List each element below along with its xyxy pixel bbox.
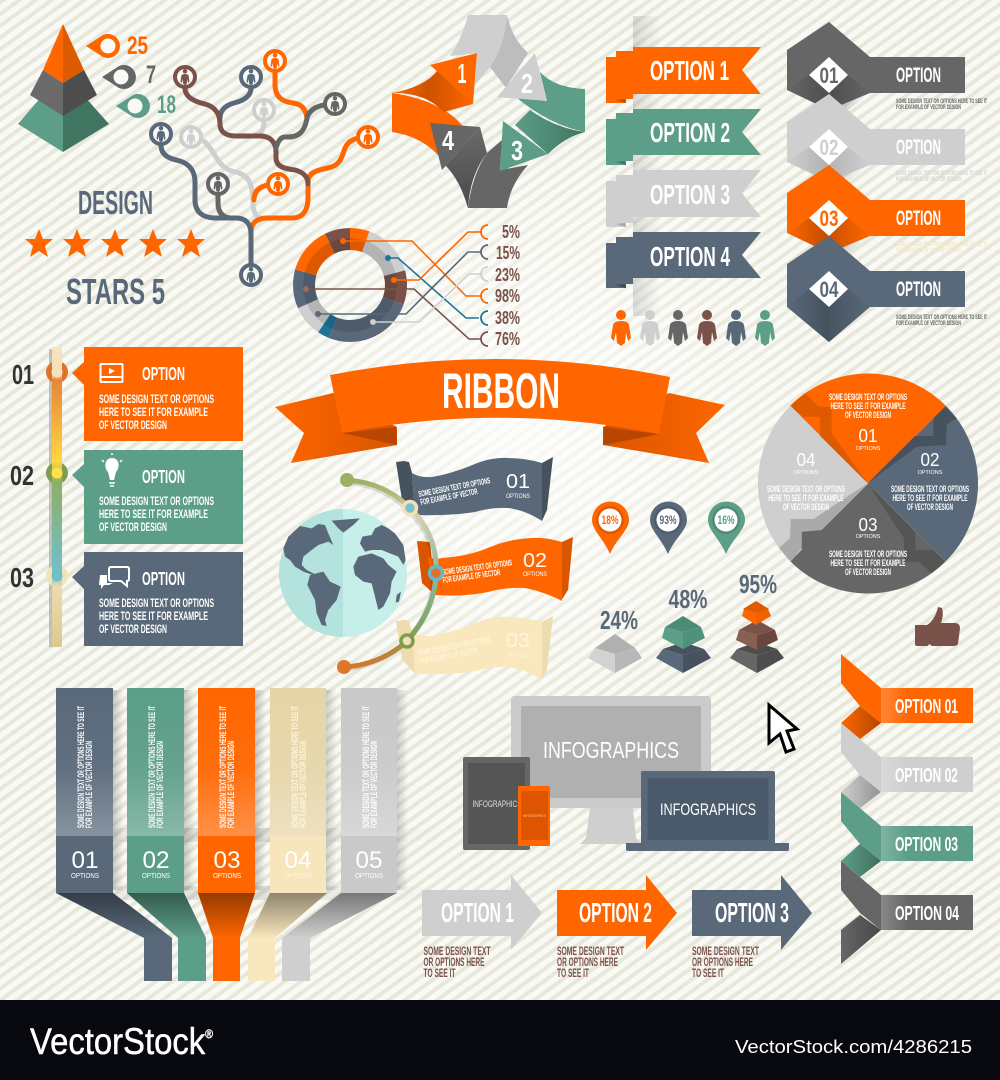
card 02: OPTION: [142, 467, 185, 487]
pin 18%: 18%: [602, 513, 619, 527]
pie sector 03: [790, 484, 946, 594]
card 03: [72, 552, 243, 646]
diamond ribbon 03: OPTION: [896, 207, 941, 230]
column 04: OPTIONS: [284, 873, 312, 880]
diamond ribbon 04: [787, 236, 987, 342]
watermark footer bar: ®: [205, 1027, 213, 1041]
card 01: OF VECTOR DESIGN: [99, 420, 167, 432]
segmented pie with options: [758, 373, 978, 594]
pie text 02: OPTIONS: [918, 470, 943, 476]
pie sector 04: [758, 406, 868, 561]
map pins: [592, 502, 745, 554]
pie text 04: 04: [796, 450, 816, 470]
timeline bar: [46, 347, 68, 647]
diamond ribbon 01: 01: [820, 63, 838, 88]
column option banners: [20, 688, 440, 981]
arrow option 1: TO SEE IT: [424, 968, 456, 980]
column 01: 01: [72, 847, 98, 874]
pie text 03: 03: [858, 515, 878, 535]
wavy flag 03: OPTIONS: [506, 652, 531, 659]
arrow head 1: [430, 53, 477, 104]
card 02: OF VECTOR DESIGN: [99, 522, 167, 534]
column 02: SOME DESIGN TEXT OR OPTIONS HERE TO SEE IT: [147, 706, 158, 828]
option 2 ribbon: OPTION 2: [650, 117, 730, 148]
ribbon banner: [275, 359, 725, 463]
pie text 02: 02: [920, 450, 940, 470]
wavy flag 02: [417, 537, 573, 601]
column 03: OPTIONS: [213, 873, 241, 880]
right tail: [603, 393, 725, 463]
arrow option 1: OR OPTIONS HERE: [424, 957, 485, 969]
column 03: SOME DESIGN TEXT OR OPTIONS HERE TO SEE IT: [218, 706, 229, 828]
pie text 01: OF VECTOR DESIGN: [845, 410, 891, 421]
pin: 18: [116, 91, 176, 119]
left tail: [275, 393, 397, 463]
pin 93%: [650, 502, 687, 554]
percent labels: 23%: [495, 265, 520, 285]
pin: 7: [102, 61, 156, 89]
wavy flag 01: FOR EXAMPLE OF VECTOR: [419, 486, 478, 507]
column 04: SOME DESIGN TEXT OR OPTIONS HERE TO SEE IT: [290, 706, 301, 828]
heading: design stars 5: [25, 184, 205, 312]
card 02: [72, 450, 243, 544]
column 02: [127, 688, 206, 981]
watermark footer bar: VectorStock.com/4286215: [735, 1037, 972, 1057]
arrow option 2: OR OPTIONS HERE: [557, 957, 618, 969]
column 04: [248, 688, 337, 981]
diamond ribbon 04: OPTION: [896, 278, 941, 301]
wavy flag 02: 02: [523, 550, 547, 572]
pin 16%: 16%: [718, 513, 735, 527]
wavy flag 03: FOR EXAMPLE OF VECTOR: [419, 645, 478, 666]
percent labels: 98%: [495, 286, 520, 306]
pie text 04: [767, 450, 845, 513]
numbered diamond ribbons: [787, 22, 987, 342]
wavy flag 02: SOME DESIGN TEXT OR OPTIONS: [442, 557, 513, 577]
watermark footer bar: [0, 1000, 1000, 1080]
option 4 ribbon: OPTION 4: [650, 241, 730, 272]
star rating: [25, 229, 205, 257]
card 03: OF VECTOR DESIGN: [99, 624, 167, 636]
percent labels: 15%: [496, 243, 520, 263]
timeline numbers: 03: [10, 562, 34, 593]
globe with continents: [279, 509, 407, 637]
pin: 18: 18: [157, 91, 176, 119]
donut ring: [304, 239, 396, 331]
tab 02: OPTION 02: [895, 765, 958, 787]
wavy flag 02: OPTIONS: [523, 571, 548, 578]
banner title: RIBBON: [442, 363, 560, 419]
pie text 03: [829, 515, 907, 578]
diamond ribbon 02: [787, 94, 987, 183]
diamond ribbon 03: [787, 165, 987, 254]
tree network diagram: [151, 51, 378, 285]
watermark footer bar: VectorStock: [30, 1021, 227, 1062]
card 03: SOME DESIGN TEXT OR OPTIONS: [99, 598, 214, 610]
pyramid with pin values: [18, 24, 176, 152]
laptop: INFOGRAPHICS: [660, 800, 756, 819]
orange stem: [392, 93, 462, 155]
pie text 01: 01: [858, 426, 878, 446]
four arrow cross: [392, 15, 585, 208]
laptop: [626, 771, 789, 851]
timeline numbers: [10, 359, 34, 593]
stack 95%: 95%: [739, 569, 777, 599]
option 1 ribbon: OPTION 1: [650, 55, 729, 86]
wavy flag 03: 03: [506, 630, 530, 652]
pie sector 02: [868, 406, 978, 561]
option arrows row: [422, 875, 812, 980]
arrow option 3: SOME DESIGN TEXT: [692, 946, 759, 958]
pie text 03: OF VECTOR DESIGN: [845, 567, 891, 578]
stack 24%: 24%: [600, 605, 638, 635]
column 03: [198, 688, 266, 981]
diamond ribbon 04: 04: [820, 277, 839, 302]
diamond ribbon 02: 02: [820, 135, 838, 160]
percent labels: 5%: [502, 222, 520, 242]
arrow head 3: 3: [511, 135, 523, 166]
card 01: [72, 347, 243, 441]
tablet: INFOGRAPHICS: [472, 799, 522, 809]
wavy flag 01: [396, 457, 553, 521]
pin: 25: [86, 32, 148, 60]
devices: [463, 696, 789, 851]
column 03: FOR EXAMPLE OF VECTOR DESIGN: [226, 741, 237, 828]
percent labels: [495, 222, 520, 349]
wavy flag 01: SOME DESIGN TEXT OR OPTIONS: [417, 475, 491, 499]
pie text 02: [891, 450, 969, 513]
arrow head 4: [430, 123, 480, 170]
wavy flag 03: [396, 616, 553, 680]
monitor: INFOGRAPHICS: [543, 737, 679, 763]
pie text 03: HERE TO SEE IT FOR EXAMPLE: [830, 558, 906, 569]
timeline numbers: 02: [10, 460, 34, 491]
arrow option 1: SOME DESIGN TEXT: [424, 946, 490, 958]
stack 48%: [656, 584, 711, 673]
phone: [518, 786, 550, 846]
stack 95%: [730, 569, 784, 673]
diamond ribbon 03: 03: [820, 206, 838, 231]
isometric block stacks: [588, 569, 784, 673]
column 01: SOME DESIGN TEXT OR OPTIONS HERE TO SEE IT: [76, 706, 87, 828]
card 02: SOME DESIGN TEXT OR OPTIONS: [99, 496, 214, 508]
percent labels: 38%: [495, 308, 520, 328]
column 05: SOME DESIGN TEXT OR OPTIONS HERE TO SEE IT: [361, 706, 372, 828]
arrow option 2: OPTION 2: [579, 897, 652, 928]
tree nodes: [151, 51, 378, 285]
card 01: HERE TO SEE IT FOR EXAMPLE: [99, 407, 208, 419]
option 4 ribbon: [606, 232, 761, 288]
option 2 ribbon: [606, 109, 761, 165]
wavy flag 01: 01: [506, 471, 530, 493]
arrow head 2: [497, 53, 547, 101]
diamond ribbon 01: OPTION: [896, 64, 941, 87]
donut chart with percent legend: [303, 222, 520, 349]
row of people icons: [611, 310, 775, 346]
folded option tabs: [841, 654, 973, 964]
pie text 01: HERE TO SEE IT FOR EXAMPLE: [830, 401, 906, 412]
tree person icons: [156, 53, 372, 283]
column 02: 02: [142, 847, 170, 874]
pie sector 01: [790, 373, 946, 484]
pin 93%: 93%: [660, 513, 677, 527]
column 02: FOR EXAMPLE OF VECTOR DESIGN: [155, 741, 166, 828]
monitor: [511, 696, 711, 844]
icon: thumbs up: [915, 607, 960, 646]
connector lines: [306, 232, 482, 339]
stack 24%: [588, 605, 642, 673]
timeline numbers: 01: [12, 359, 34, 390]
pie text 01: OPTIONS: [856, 446, 881, 452]
column 05: 05: [356, 847, 382, 874]
column 02: OPTIONS: [142, 873, 170, 880]
card 03: HERE TO SEE IT FOR EXAMPLE: [99, 611, 208, 623]
column 01: OPTIONS: [71, 873, 99, 880]
column 05: [282, 688, 408, 981]
heading: design stars 5: STARS 5: [66, 271, 165, 312]
tab 03: [841, 792, 973, 877]
tab 02: [841, 723, 973, 808]
arrow head 3: [500, 121, 548, 171]
column 01: [56, 688, 172, 981]
phone: INFOGRAPHICS: [523, 814, 546, 818]
column 03: 03: [214, 847, 240, 874]
arrow head 4: 4: [442, 125, 454, 156]
banner body: [330, 359, 670, 434]
pie text 01: [829, 392, 907, 452]
pin 16%: [708, 502, 745, 554]
tab 01: [841, 654, 973, 739]
column 04: FOR EXAMPLE OF VECTOR DESIGN: [298, 741, 309, 828]
arrow option 2: TO SEE IT: [557, 968, 589, 980]
stack 48%: 48%: [668, 584, 708, 614]
arrow head 2: 2: [521, 68, 533, 99]
heading: design stars 5: DESIGN: [78, 184, 153, 221]
column 05: FOR EXAMPLE OF VECTOR DESIGN: [369, 741, 380, 828]
pin 18%: [592, 502, 629, 554]
wavy flag 02: FOR EXAMPLE OF VECTOR: [442, 567, 501, 585]
column 01: FOR EXAMPLE OF VECTOR DESIGN: [84, 741, 95, 828]
option ribbons stack: [606, 16, 761, 316]
arrow head 1: 1: [458, 58, 466, 89]
segmented pie with options: SOME DESIGN TEXT OR OPTIONS: [829, 549, 907, 560]
arrow option 3: [692, 875, 812, 980]
arrow option 3: TO SEE IT: [692, 968, 724, 980]
pin: 25: 25: [127, 32, 148, 60]
arrow option 1: OPTION 1: [441, 897, 514, 928]
option 3 ribbon: [606, 170, 761, 227]
pin: 7: 7: [146, 61, 156, 89]
card 01: SOME DESIGN TEXT OR OPTIONS: [99, 394, 214, 406]
bracket terminals: [481, 225, 488, 346]
tab 04: [841, 861, 973, 964]
diamond ribbon 02: OPTION: [896, 136, 941, 159]
pie text 04: OPTIONS: [794, 470, 819, 476]
arrow option 2: SOME DESIGN TEXT: [557, 946, 624, 958]
segmented pie with options: SOME DESIGN TEXT OR OPTIONS: [767, 484, 845, 495]
card 01: OPTION: [142, 364, 185, 384]
pie text 02: OF VECTOR DESIGN: [907, 502, 953, 513]
tablet: [463, 757, 530, 850]
pie text 04: HERE TO SEE IT FOR EXAMPLE: [768, 493, 844, 504]
arrow option 2: [557, 875, 677, 980]
tab 04: OPTION 04: [895, 903, 960, 925]
column 05: OPTIONS: [355, 873, 383, 880]
wavy flag 03: SOME DESIGN TEXT OR OPTIONS: [417, 634, 491, 658]
green stem: [517, 72, 585, 132]
option 3 ribbon: OPTION 3: [650, 179, 730, 210]
arrow option 1: [422, 875, 542, 980]
percent labels: 76%: [495, 329, 520, 349]
icon: mouse cursor: [769, 705, 797, 752]
diamond ribbon 01: [787, 22, 987, 111]
segmented pie with options: SOME DESIGN TEXT OR OPTIONS: [829, 392, 907, 403]
tab 03: OPTION 03: [895, 834, 958, 856]
card 02: HERE TO SEE IT FOR EXAMPLE: [99, 509, 208, 521]
wavy flag 01: OPTIONS: [506, 493, 531, 500]
vertical timeline with cards: [10, 347, 243, 647]
arrow option 3: OPTION 3: [715, 897, 789, 928]
option 1 ribbon: [606, 47, 761, 103]
column 04: 04: [284, 847, 312, 874]
tab 01: OPTION 01: [895, 696, 958, 718]
card 03: OPTION: [142, 569, 185, 589]
grey stem: [450, 15, 507, 85]
pie text 03: OPTIONS: [856, 534, 881, 540]
pie text 04: OF VECTOR DESIGN: [783, 502, 829, 513]
curved connector arc with nodes: [337, 473, 442, 674]
dark stem: [442, 127, 487, 208]
arrow option 3: OR OPTIONS HERE: [692, 957, 753, 969]
